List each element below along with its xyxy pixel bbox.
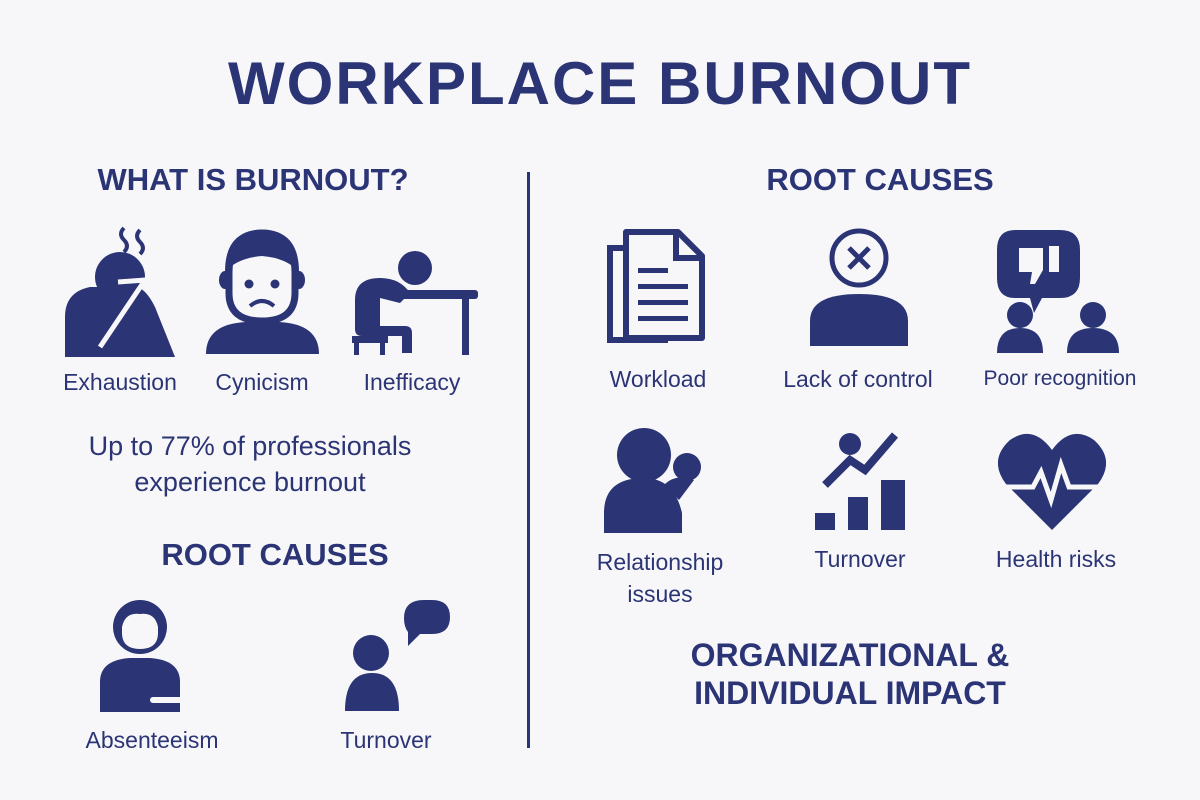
label: turnover right: Turnover [814, 546, 906, 572]
icon: turnover right [815, 432, 905, 530]
label: relationship issues: issues [627, 581, 693, 607]
stat text: experience burnout [134, 467, 366, 497]
label: cynicism: Cynicism [215, 369, 309, 395]
label: workload: Workload [610, 366, 706, 392]
icon: inefficacy [352, 251, 478, 355]
label: health risks: Health risks [996, 546, 1116, 572]
stat text: Up to 77% of professionals [89, 431, 411, 461]
label: relationship issues: Relationship [597, 549, 723, 575]
divider [527, 172, 530, 748]
icon: turnover left [345, 600, 450, 711]
icon: health risks [998, 434, 1106, 530]
icon: absenteeism [100, 600, 180, 712]
label: absenteeism: Absenteeism [86, 727, 218, 753]
icon: exhaustion [65, 226, 175, 357]
label: exhaustion: Exhaustion [63, 369, 177, 395]
label: poor recognition: Poor recognition [984, 367, 1136, 390]
label: relationship issues [597, 549, 723, 607]
label: turnover left: Turnover [340, 727, 432, 753]
stat text [89, 431, 411, 497]
title: WORKPLACE BURNOUT [228, 50, 972, 117]
heading: organizational impact [691, 637, 1009, 711]
icon: poor recognition [997, 230, 1119, 353]
icon: relationship issues [604, 428, 701, 533]
icon: lack of control [810, 228, 908, 346]
heading: root causes right: ROOT CAUSES [766, 162, 994, 197]
heading: what is burnout: WHAT IS BURNOUT? [97, 162, 409, 197]
heading: root causes left: ROOT CAUSES [161, 537, 389, 572]
heading: organizational impact: INDIVIDUAL IMPACT [694, 675, 1006, 711]
label: inefficacy: Inefficacy [364, 369, 460, 395]
label: lack of control: Lack of control [783, 366, 933, 392]
icon: workload [607, 229, 705, 343]
heading: organizational impact: ORGANIZATIONAL & [691, 637, 1009, 673]
icon: cynicism [206, 230, 319, 354]
